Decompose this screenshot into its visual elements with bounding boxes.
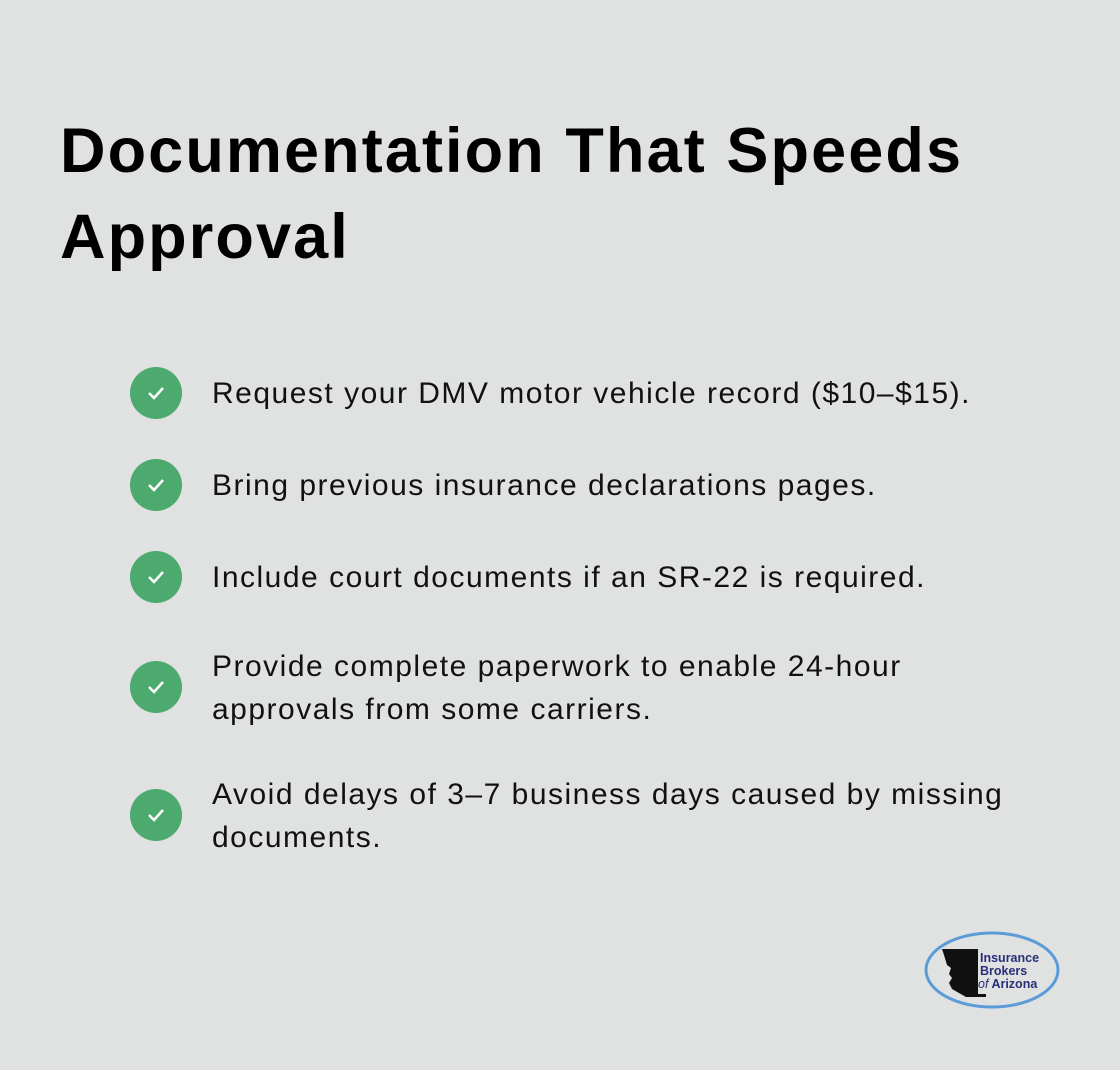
text 5: documents. (212, 821, 382, 854)
text 4: Provide complete paperwork to enable 24-hour (212, 650, 902, 683)
text 4 (212, 650, 902, 726)
item 1 (130, 367, 971, 419)
icon: check (130, 367, 182, 419)
item 3 (130, 551, 926, 603)
icon: check (130, 459, 182, 511)
text 1: Request your DMV motor vehicle record ($10–$15). (212, 377, 971, 410)
logo: Insurance (980, 951, 1039, 965)
icon: check (130, 789, 182, 841)
item 4 (130, 650, 902, 726)
text 3: Include court documents if an SR-22 is required. (212, 561, 926, 594)
text 5: Avoid delays of 3–7 business days caused by missing (212, 778, 1003, 811)
title (60, 116, 963, 272)
title: Approval (60, 202, 350, 272)
text 2: Bring previous insurance declarations pages. (212, 469, 877, 502)
text 5 (212, 778, 1003, 854)
icon: check (130, 551, 182, 603)
logo (924, 932, 1060, 1008)
item 5 (130, 778, 1003, 854)
item 2 (130, 459, 877, 511)
logo: Brokers (980, 964, 1027, 978)
icon: check (130, 661, 182, 713)
title: Documentation That Speeds (60, 116, 963, 186)
logo: of Arizona (978, 977, 1038, 991)
text 4: approvals from some carriers. (212, 693, 652, 726)
